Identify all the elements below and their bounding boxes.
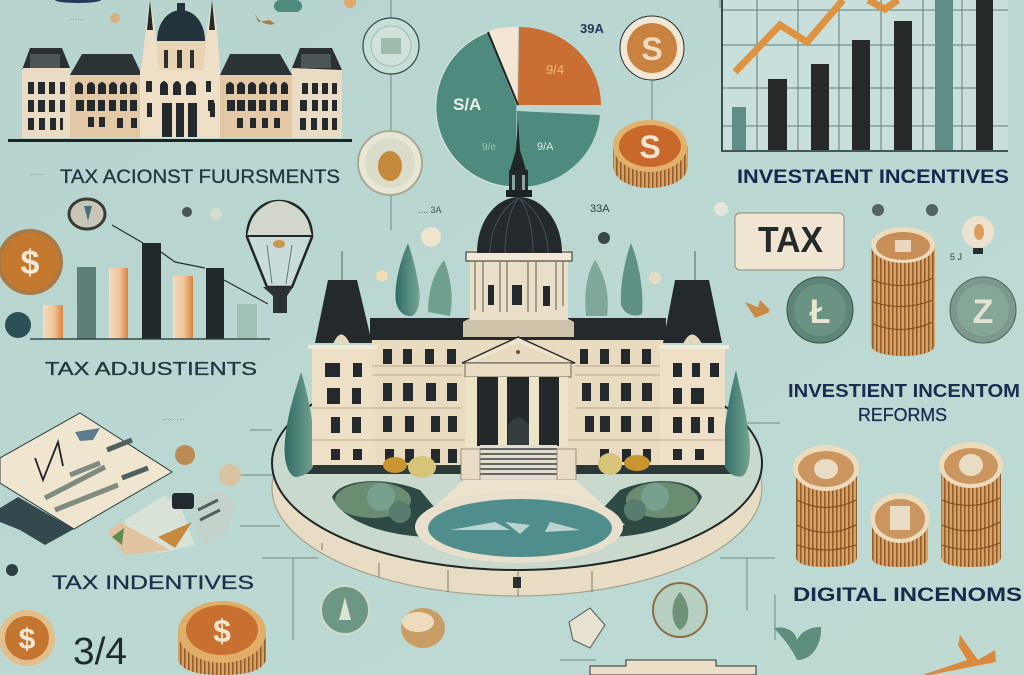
coin stack middle <box>870 493 930 567</box>
bars <box>43 243 257 339</box>
icon: cream nut circle <box>358 131 422 195</box>
icon: small bulb <box>962 216 994 254</box>
plinths <box>461 449 576 480</box>
pie chart: 9/4 <box>546 62 564 77</box>
icon: green coin left: Ł <box>810 293 830 331</box>
heading: tax adjustients: TAX ADJUSTIENTS <box>45 358 257 379</box>
document shadow <box>0 497 74 545</box>
tax box: TAX <box>758 219 823 260</box>
small scattered labels: 33A <box>590 203 610 215</box>
icon: eye badge <box>69 199 105 229</box>
flowers <box>383 453 650 478</box>
small scattered labels: ...... <box>70 12 85 22</box>
central arches <box>160 81 197 137</box>
centre terrace <box>463 317 574 337</box>
gardens <box>332 481 445 537</box>
windows <box>325 349 719 463</box>
clipboard <box>590 660 756 675</box>
icon: bottom-left coin <box>0 610 55 666</box>
steps <box>480 445 557 479</box>
icon: top right coin: S <box>641 31 663 67</box>
platform panel seams <box>322 543 592 596</box>
coin stack left <box>793 445 859 567</box>
pie chart: 9/A <box>537 141 554 153</box>
panel: top-left parliament building <box>8 0 352 142</box>
pediment <box>462 337 575 363</box>
right tower <box>292 48 342 138</box>
portico interior <box>477 377 560 446</box>
ground line <box>8 139 352 142</box>
connector lines <box>0 0 780 660</box>
small scattered labels: .... 3A <box>418 205 442 215</box>
axes <box>722 0 1008 151</box>
floor lines <box>312 366 725 440</box>
left tower <box>22 48 70 138</box>
grid <box>722 0 1008 150</box>
heading: digital incenoms: DIGITAL INCENOMS <box>793 585 1022 606</box>
heading: reforms: REFORMS <box>858 404 947 425</box>
pond <box>428 499 612 557</box>
panel: tax indentives document <box>0 413 172 545</box>
heading: investaent incentives: INVESTAENT INCENTIVES <box>737 167 1009 188</box>
coin stack: tall <box>871 227 935 356</box>
icon: green coin right: Z <box>973 293 993 331</box>
icon: green badge bottom <box>321 586 369 634</box>
icon: folded note <box>569 608 605 648</box>
wing facades <box>372 340 664 465</box>
label: 3/4: 3/4 <box>73 631 127 673</box>
tax box <box>735 213 844 270</box>
pond rim <box>415 491 623 563</box>
small scattered labels: ...... <box>30 167 45 177</box>
dome <box>157 10 205 42</box>
icon: coin stack bottom: $ <box>213 613 231 649</box>
pie chart <box>436 27 601 187</box>
building base shadow <box>300 464 740 474</box>
lantern <box>509 170 528 194</box>
top edge icons <box>55 0 356 25</box>
platform side <box>272 380 762 596</box>
pie chart: 9/e <box>482 142 496 153</box>
document sheet <box>0 413 172 529</box>
icon: green leaves <box>774 627 821 660</box>
small scattered labels <box>30 12 962 422</box>
bars <box>732 0 993 150</box>
windows <box>28 81 337 130</box>
document chart line <box>35 442 63 480</box>
left tower <box>312 346 375 465</box>
side tree left <box>285 372 315 477</box>
icon: coin stack bottom <box>178 601 266 675</box>
panel: investaent chart <box>722 0 1008 151</box>
document data rows <box>45 463 118 510</box>
icon: green coin right <box>950 277 1016 343</box>
pie labels: S/A <box>453 95 481 114</box>
heading: tax indentives: TAX INDENTIVES <box>52 573 254 594</box>
dark roof wings <box>370 318 666 341</box>
coin stack right <box>939 442 1003 567</box>
antennas <box>342 251 695 280</box>
trend line <box>112 225 268 304</box>
icon: green coin left <box>787 277 853 343</box>
back trees <box>396 243 643 316</box>
icon: orange signpost <box>922 635 996 675</box>
small scattered labels: ..... ... <box>162 412 185 422</box>
icon: thick coin <box>613 120 688 188</box>
side tree right <box>723 370 750 477</box>
right tower <box>660 346 725 465</box>
icon: crossed tools <box>745 300 770 318</box>
coin icon <box>0 229 63 295</box>
path and forecourt <box>415 480 625 525</box>
icon: top right coin <box>620 16 684 80</box>
icon: small dark badge <box>5 312 31 338</box>
left wing <box>70 75 140 138</box>
right wing <box>220 75 292 138</box>
dome <box>477 197 562 253</box>
icon: translucent circle top <box>363 18 419 74</box>
platform top <box>272 356 762 570</box>
orange trend line <box>735 0 898 72</box>
decorative dots <box>6 13 938 576</box>
icon: plant circle <box>653 583 707 637</box>
coin icon: $ <box>21 244 40 282</box>
icon: coin pile <box>401 608 445 648</box>
columns <box>465 377 568 447</box>
panel: tax adjustients bar chart <box>0 199 313 340</box>
heading: investient incentom: INVESTIENT INCENTOM <box>788 380 1020 401</box>
coin stacks row <box>793 442 1003 567</box>
icon: bottom-left coin: $ <box>19 623 36 656</box>
money pile <box>108 445 241 555</box>
label: 39a: 39A <box>580 21 604 36</box>
centre block <box>140 70 220 138</box>
icon: thick coin: S <box>639 129 661 165</box>
icon: light bulb <box>246 201 313 313</box>
spires <box>141 0 159 70</box>
panel: central government building <box>272 120 762 596</box>
chart backdrop <box>722 0 1008 150</box>
heading: tax acionst fuurnaments: TAX ACIONST FUURSMENTS <box>60 167 340 188</box>
drum <box>470 250 568 320</box>
small scattered labels: 5 J <box>950 252 962 262</box>
